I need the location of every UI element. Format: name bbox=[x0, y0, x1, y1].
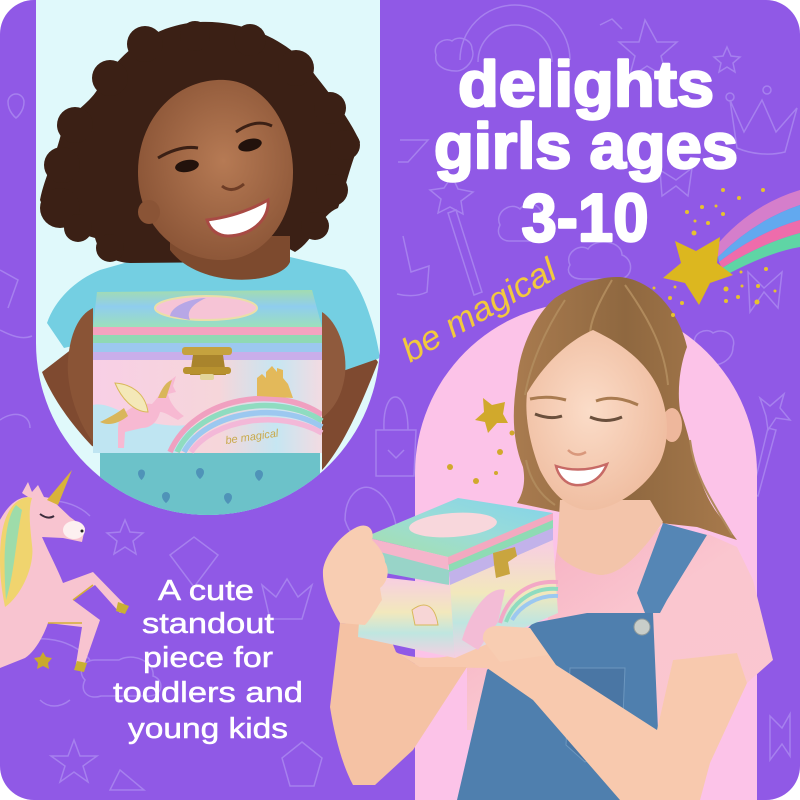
girl's arm under box bbox=[397, 625, 747, 800]
eye and muzzle bbox=[40, 514, 54, 518]
icon: unicorn illustration bbox=[0, 470, 129, 672]
lower left arm bbox=[330, 623, 467, 785]
latch bbox=[182, 347, 232, 380]
latch bbox=[493, 547, 517, 578]
clouds on box bbox=[93, 404, 194, 453]
face bbox=[138, 80, 293, 260]
rainbow on box bbox=[170, 398, 322, 452]
gold tummy line bbox=[48, 585, 93, 623]
t-shirt bbox=[467, 525, 773, 730]
hair bbox=[514, 277, 737, 540]
icon: music box held by right girl bbox=[358, 498, 558, 658]
panel: pink arch backdrop bbox=[415, 302, 757, 800]
eyes bbox=[175, 138, 262, 172]
eyebrows bbox=[530, 397, 638, 405]
overall pocket bbox=[566, 668, 625, 762]
curly hair bbox=[40, 22, 360, 263]
pegasus decoration bbox=[412, 605, 438, 625]
caption text: standout bbox=[142, 608, 274, 640]
horn bbox=[47, 470, 72, 505]
hair curls bbox=[40, 21, 360, 262]
arms bbox=[42, 351, 93, 446]
caption text: piece for bbox=[143, 642, 273, 674]
nose bbox=[222, 184, 244, 190]
neck bbox=[557, 500, 663, 575]
icon: music box held by left girl bbox=[93, 290, 322, 453]
small star bbox=[34, 652, 52, 669]
photo: smiling girl holding music box bbox=[40, 21, 380, 523]
heading: girls ages bbox=[434, 110, 738, 182]
smile bbox=[207, 200, 268, 236]
left girl's left hand bbox=[68, 308, 93, 442]
panel: light blue rounded photo backdrop bbox=[36, 0, 380, 515]
smile bbox=[556, 464, 607, 485]
denim overalls bbox=[457, 613, 658, 800]
ears bbox=[138, 202, 159, 224]
caption text: A cute bbox=[158, 575, 254, 607]
downcast eyes bbox=[535, 414, 622, 420]
rainbow bbox=[500, 582, 558, 623]
ear bbox=[666, 408, 682, 442]
be magical script: be magical bbox=[395, 250, 564, 370]
hair strands bbox=[525, 280, 732, 535]
unicorn on box bbox=[118, 376, 184, 448]
strap button bbox=[634, 619, 650, 635]
heading bbox=[434, 48, 738, 256]
castle bbox=[257, 366, 293, 398]
hooves bbox=[116, 602, 129, 614]
caption text: young kids bbox=[128, 713, 288, 745]
caption text: toddlers and bbox=[113, 677, 303, 709]
t-shirt bbox=[47, 250, 380, 515]
icon: gold star with rainbow trail bbox=[652, 188, 800, 317]
heading: 3-10 bbox=[522, 180, 648, 256]
overall strap bbox=[637, 523, 707, 613]
shirt hearts bbox=[138, 468, 263, 504]
caption text bbox=[113, 575, 303, 745]
unicorn body bbox=[0, 482, 128, 670]
icon: small gold star and sparkles bbox=[447, 398, 514, 484]
photo: girl looking at music box bbox=[330, 277, 773, 800]
nose bbox=[568, 450, 586, 455]
left hand on box bbox=[323, 525, 388, 625]
be magical label: be magical bbox=[225, 428, 280, 447]
mane bbox=[0, 497, 32, 607]
neck bbox=[170, 236, 290, 280]
right hand fingers bbox=[483, 626, 548, 662]
eyebrows bbox=[158, 123, 272, 158]
left girl's right hand bbox=[322, 312, 345, 418]
heading: delights bbox=[458, 48, 714, 120]
face bbox=[526, 330, 667, 510]
